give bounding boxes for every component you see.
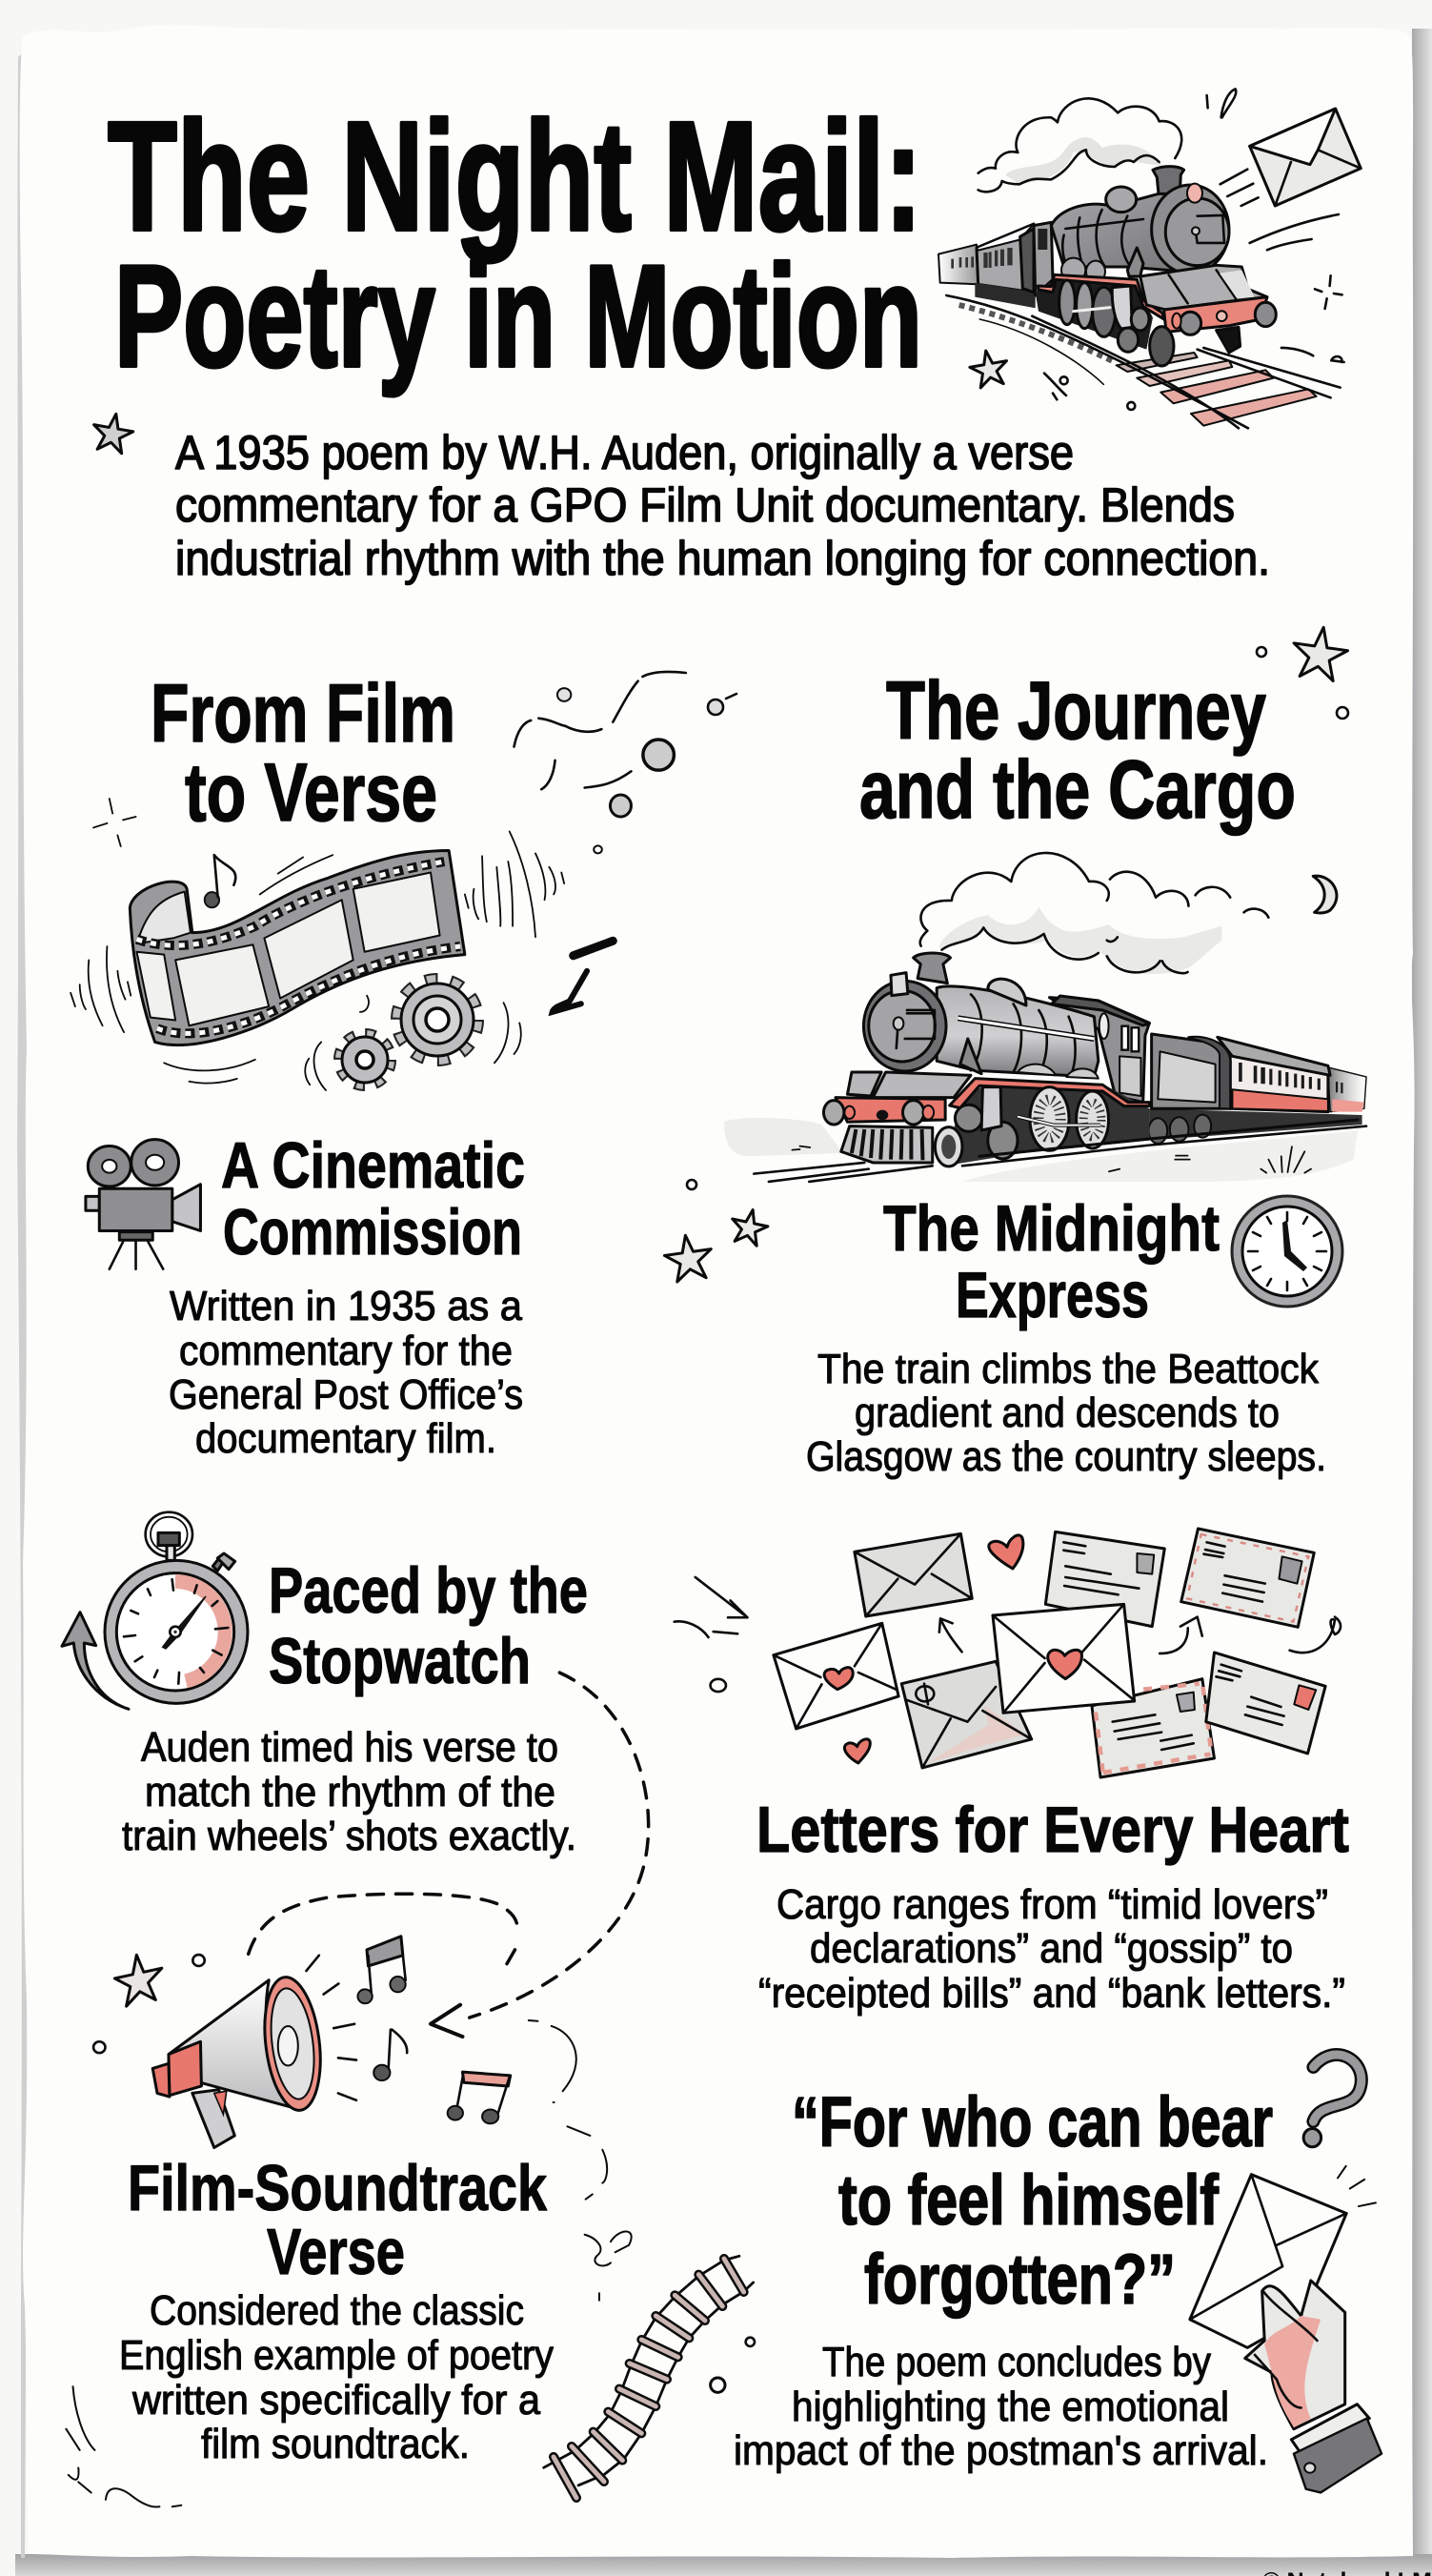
gray envelope: [855, 1533, 972, 1616]
body text: The train climbs the Beattock: [817, 1346, 1320, 1392]
cab: [1049, 996, 1149, 1103]
body text: [734, 2339, 1268, 2474]
subsection: the midnight express: [806, 1192, 1342, 1480]
body text: [806, 1346, 1326, 1480]
subheading: Commission: [223, 1196, 522, 1268]
ground: [724, 1118, 1358, 1182]
subheading: [883, 1192, 1220, 1331]
heading: [151, 668, 455, 839]
icon: stopwatch: [62, 1512, 248, 1709]
body text: Glasgow as the country sleeps.: [806, 1433, 1326, 1480]
icon: megaphone with notes: [66, 1894, 632, 2507]
hearts: [844, 1535, 1023, 1763]
icon: gears: [339, 980, 477, 1085]
icon: star: [90, 411, 135, 455]
heading: and the Cargo: [859, 744, 1296, 836]
panel: introduction: [90, 411, 1270, 585]
carriages: [938, 222, 1053, 308]
illustration: railway track: [544, 2256, 755, 2498]
body text: highlighting the emotional: [792, 2383, 1229, 2430]
subheading: A Cinematic: [221, 1129, 525, 1202]
icon: film camera: [86, 1140, 200, 1269]
subheading: Express: [956, 1259, 1149, 1331]
quote: to feel himself: [838, 2160, 1219, 2240]
question mark: [1303, 2055, 1361, 2147]
title: The Night Mail:: [108, 89, 922, 263]
track sleepers and rails: [946, 295, 1341, 428]
musical note and motion lines: [71, 799, 564, 1090]
body text: film soundtrack.: [201, 2421, 470, 2467]
airmail letter, lower: [1092, 1679, 1214, 1777]
icon: crescent moon: [1313, 876, 1337, 913]
body text: written specifically for a: [131, 2377, 540, 2424]
arrows and dot: [675, 1577, 747, 1692]
body text: impact of the postman's arrival.: [734, 2427, 1268, 2474]
postcard, right: [1206, 1653, 1325, 1754]
motion marks, sparkle and star: [967, 89, 1344, 410]
panel: film-soundtrack verse: [66, 1894, 632, 2507]
body text: Cargo ranges from “timid lovers”: [777, 1881, 1328, 1928]
heading: to Verse: [185, 747, 437, 839]
illustration: midnight express train: [724, 853, 1366, 1182]
body text: Auden timed his verse to: [141, 1724, 558, 1771]
music notes: [357, 1937, 511, 2123]
running gear and front: [1036, 265, 1276, 366]
decorative dashes and bubbles: [514, 672, 686, 1012]
center envelope with heart: [993, 1604, 1135, 1713]
subheading: [269, 1554, 588, 1697]
illustration: steam locomotive with flying envelope: [938, 89, 1361, 428]
front and running gear: [823, 1072, 1149, 1166]
subheading: Paced by the: [269, 1554, 588, 1627]
panel: closing quote: [734, 2055, 1382, 2492]
illustration: hand holding envelope: [1190, 2055, 1382, 2492]
steam cloud: [978, 98, 1181, 192]
subsection: a cinematic commission: [86, 1129, 525, 1462]
subheading: [221, 1129, 525, 1268]
envelope: [1190, 2166, 1376, 2347]
title: [108, 89, 922, 397]
body text: match the rhythm of the: [145, 1769, 555, 1815]
cuff and sleeve: [1291, 2404, 1382, 2492]
body text: [119, 2287, 554, 2467]
body text: declarations” and “gossip” to: [810, 1925, 1293, 1972]
panel: from film to verse: [71, 668, 686, 1462]
squiggles: [66, 2020, 632, 2507]
carriages and tender: [1149, 1034, 1366, 1144]
title: Poetry in Motion: [114, 235, 922, 397]
film strip: [130, 851, 465, 1045]
subheading: [128, 2152, 547, 2288]
panel: the journey and the cargo: [662, 623, 1366, 1480]
body text: Written in 1935 as a: [170, 1283, 522, 1329]
megaphone: [152, 1956, 356, 2148]
small arrows: [939, 1617, 1341, 1653]
panel: letters for every heart: [675, 1529, 1349, 2017]
subheading: Verse: [267, 2216, 405, 2288]
body text: train wheels’ shots exactly.: [122, 1813, 576, 1859]
intro text: industrial rhythm with the human longing for connection.: [175, 532, 1270, 585]
quote: [792, 2082, 1273, 2319]
intro text: [175, 426, 1270, 585]
decorative stars and dots: [662, 623, 1350, 1283]
body text: [122, 1724, 576, 1859]
body text: English example of poetry: [119, 2332, 554, 2379]
body text: General Post Office’s: [169, 1371, 523, 1418]
body text: documentary film.: [195, 1415, 496, 1462]
rails and grass: [754, 1120, 1366, 1182]
flying envelope: [1250, 109, 1361, 206]
quote: forgotten?”: [864, 2240, 1176, 2319]
subheading: Film-Soundtrack: [128, 2152, 547, 2224]
dashed arrow: stopwatch to megaphone: [431, 1673, 649, 2037]
icon: clock: [1232, 1196, 1342, 1307]
body text: [169, 1283, 523, 1462]
hand: [1245, 2281, 1345, 2429]
heading: [859, 665, 1296, 836]
quote: “For who can bear: [792, 2082, 1273, 2161]
intro text: commentary for a GPO Film Unit documentary. Blends: [175, 478, 1235, 532]
airmail letter: [1181, 1529, 1314, 1627]
illustration: film strip with gears: [71, 799, 564, 1090]
heading: The Journey: [886, 665, 1266, 757]
heading: From Film: [151, 668, 455, 760]
boiler: [863, 953, 1099, 1079]
body text: Considered the classic: [150, 2287, 524, 2334]
panel: paced by the stopwatch: [62, 1512, 588, 1859]
star and dots: [93, 1950, 205, 2053]
subheading: Stopwatch: [269, 1625, 531, 1697]
body text: “receipted bills” and “bank letters.”: [758, 1970, 1345, 2017]
steam cloud: [920, 853, 1268, 974]
body text: The poem concludes by: [822, 2339, 1211, 2385]
boiler and smokebox: [1051, 167, 1229, 282]
white envelope with heart, left: [774, 1623, 898, 1729]
illustration: pile of envelopes and hearts: [774, 1529, 1341, 1777]
body text: gradient and descends to: [855, 1389, 1280, 1436]
intro text: A 1935 poem by W.H. Auden, originally a verse: [175, 426, 1074, 479]
body text: commentary for the: [179, 1328, 513, 1374]
subheading: The Midnight: [883, 1192, 1220, 1265]
body text: [758, 1881, 1345, 2017]
postcard: [1045, 1531, 1164, 1627]
gray envelope, lower: [901, 1661, 1032, 1768]
